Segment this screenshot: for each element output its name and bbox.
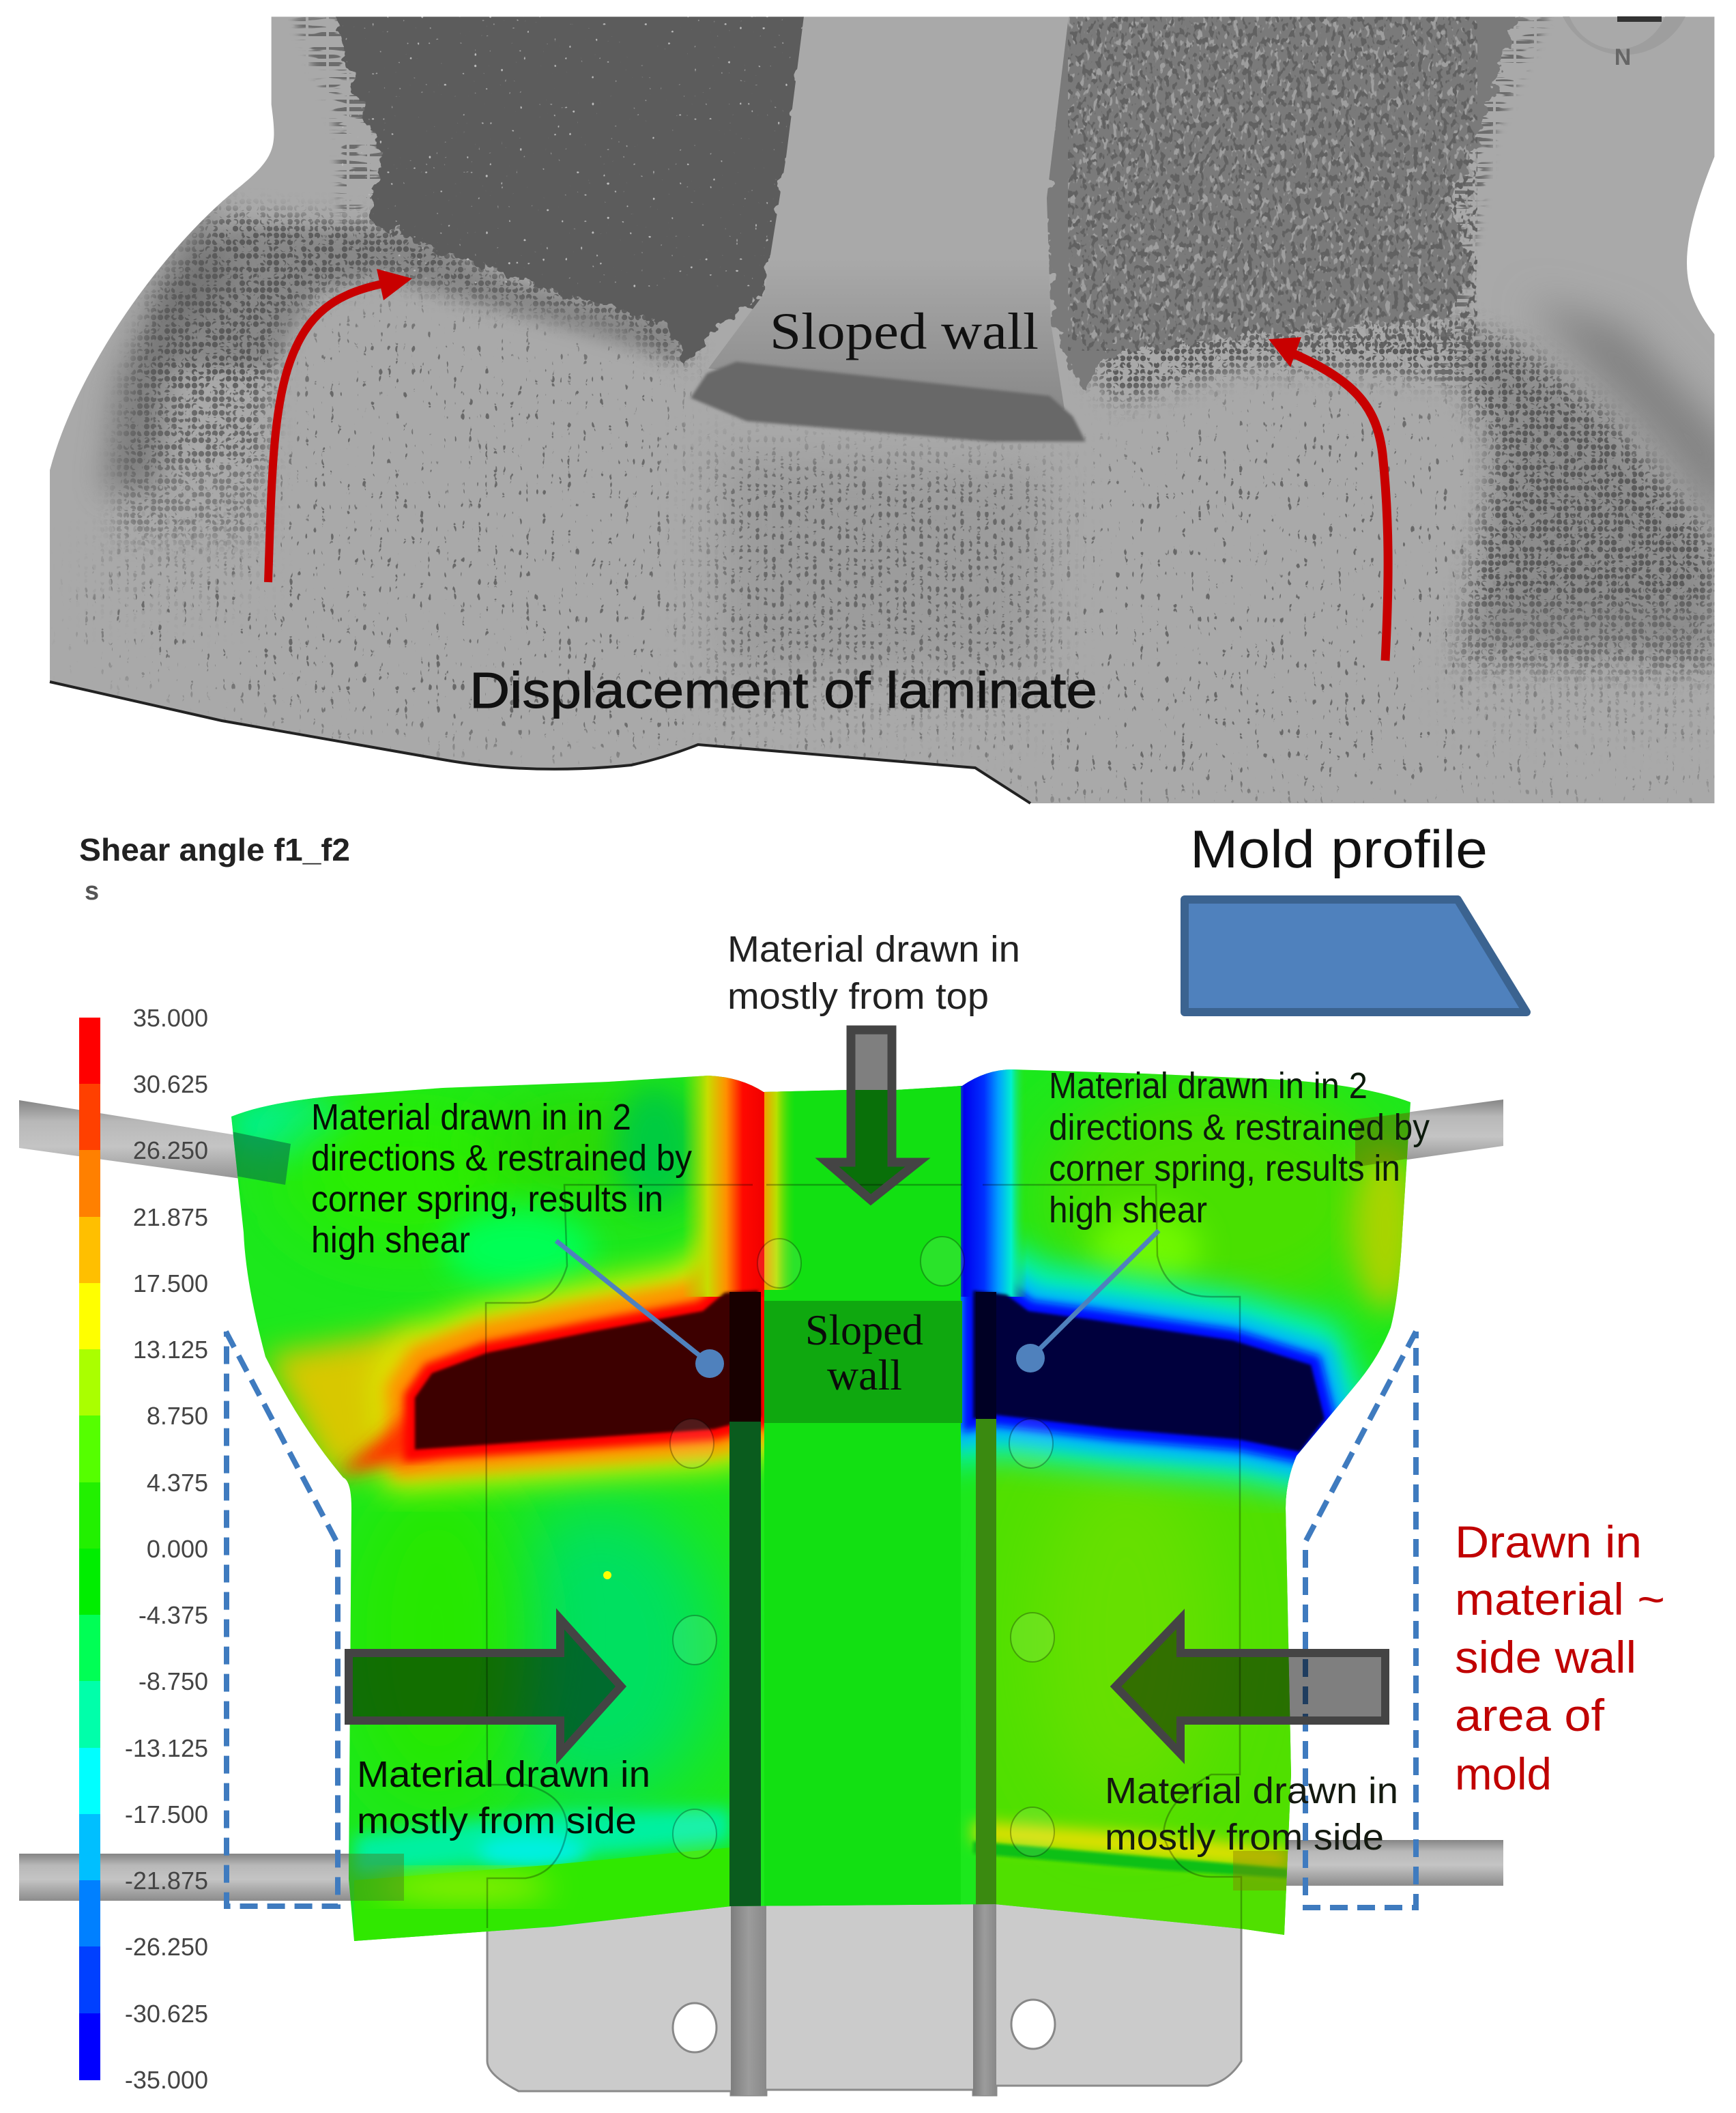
callout: right high shear: directions & restrained by <box>1049 1107 1430 1148</box>
dashed outline: left side wall <box>226 1332 338 1906</box>
compass marker <box>1563 16 1686 70</box>
contour: bottom edge bands <box>354 1809 1288 1945</box>
legend unit: s <box>85 877 99 906</box>
mold vertical bars over sheet <box>729 1292 996 1906</box>
plate holes <box>673 2000 1055 2052</box>
callout: drawn in material note: Drawn in <box>1455 1517 1642 1567</box>
legend: scale values: 8.750 <box>147 1402 208 1430</box>
label: sloped wall (contour view) <box>805 1306 923 1399</box>
legend: scale values: 4.375 <box>147 1469 208 1497</box>
compass marker: N <box>1615 44 1631 70</box>
arrow: material drawn from right side <box>1116 1619 1385 1754</box>
callout: right high shear <box>1049 1065 1430 1231</box>
mold plate <box>487 1877 1241 2095</box>
label: displacement of laminate: Displacement of laminate <box>469 662 1097 719</box>
mold holes seen through sheet <box>670 1237 1054 1858</box>
legend: scale values: 13.125 <box>133 1336 208 1364</box>
sloped wall lower band <box>691 362 1086 442</box>
callout: drawn in material note: area of <box>1455 1690 1605 1740</box>
legend: scale values: 0.000 <box>147 1535 208 1563</box>
callout: right high shear: Material drawn in in 2 <box>1049 1065 1368 1106</box>
central green column <box>764 1051 962 1952</box>
text: material drawn from top: mostly from top <box>727 976 989 1017</box>
contour: positive shear hot zone <box>265 1065 766 1478</box>
callout: drawn in material note: side wall <box>1455 1632 1636 1682</box>
heading: shear angle legend title: Shear angle f1_f2 <box>79 832 350 867</box>
simulated laminate sheet <box>0 0 1736 819</box>
text: material drawn from top: Material drawn in <box>727 929 1020 970</box>
legend: scale values: -21.875 <box>125 1867 208 1895</box>
legend: scale values: -8.750 <box>139 1667 208 1695</box>
contour: negative shear cold zone <box>955 1065 1337 1458</box>
heading: mold profile: Mold profile <box>1190 819 1488 879</box>
label: sloped wall (top view): Sloped wall <box>770 303 1039 360</box>
text: material drawn from left side: mostly from side <box>357 1800 637 1841</box>
right dense laminate block <box>1047 0 1523 389</box>
icon: mold profile shape <box>1185 900 1527 1012</box>
legend: scale values: -30.625 <box>125 2000 208 2028</box>
callout: right high shear: high shear <box>1049 1190 1207 1231</box>
text: material drawn from right side: mostly from side <box>1105 1817 1384 1858</box>
panel: displacement simulation view <box>0 0 1736 819</box>
callout: left high shear: high shear <box>311 1220 470 1261</box>
callout: left high shear <box>311 1097 692 1261</box>
callout: left high shear: directions & restrained by <box>311 1138 692 1179</box>
text: material drawn from left side <box>357 1754 650 1841</box>
sheet edge outline <box>50 682 1030 803</box>
rod: upper right <box>1355 1099 1503 1167</box>
rod overlap tints <box>231 1112 1410 1901</box>
label: sloped wall (contour view): Sloped <box>805 1306 923 1354</box>
callout: right high shear: corner spring, results in <box>1049 1148 1400 1189</box>
label: sloped wall (contour view): wall <box>827 1351 902 1399</box>
text: material drawn from right side <box>1105 1770 1398 1858</box>
text: material drawn from right side: Material drawn in <box>1105 1770 1398 1811</box>
rod: lower right <box>1233 1840 1503 1886</box>
legend: scale values: 35.000 <box>133 1004 208 1032</box>
chart: shear angle contour sheet <box>205 1051 1433 1952</box>
legend: scale values: 30.625 <box>133 1070 208 1098</box>
dashed outline: right side wall <box>1305 1332 1416 1908</box>
text: material drawn from left side: Material drawn in <box>357 1754 650 1795</box>
rod: lower left <box>19 1854 404 1901</box>
callout: drawn in material note: mold <box>1455 1749 1552 1799</box>
mold outline seen through sheet <box>486 1185 1241 1931</box>
legend: scale values: 21.875 <box>133 1203 208 1231</box>
legend: scale values: 17.500 <box>133 1269 208 1297</box>
callout: left high shear: corner spring, results in <box>311 1179 663 1220</box>
legend: scale values: -35.000 <box>125 2066 208 2094</box>
text: material drawn from top <box>727 929 1020 1017</box>
legend: scale values <box>125 1004 208 2094</box>
legend: scale values: -26.250 <box>125 1933 208 1961</box>
arrow: right laminate displacement <box>1269 337 1388 661</box>
legend: colour scale bar <box>79 1018 100 2080</box>
legend: scale values: -17.500 <box>125 1800 208 1828</box>
stray yellow node <box>603 1571 611 1579</box>
arrow: material drawn from top <box>827 1030 918 1200</box>
callout: drawn in material note <box>1455 1517 1665 1799</box>
arrow: material drawn from left side <box>349 1619 621 1754</box>
arrow: left laminate displacement <box>268 269 412 582</box>
callout: drawn in material note: material ~ <box>1455 1574 1665 1624</box>
legend: scale values: 26.250 <box>133 1136 208 1164</box>
rod: upper left <box>19 1100 291 1185</box>
left dense laminate block <box>332 0 814 366</box>
sloped wall surface <box>708 16 1069 409</box>
leader: right high shear zone <box>1016 1231 1159 1372</box>
leader: left high shear zone <box>556 1241 724 1378</box>
legend: scale values: -13.125 <box>125 1734 208 1762</box>
callout: left high shear: Material drawn in in 2 <box>311 1097 631 1138</box>
legend: scale values: -4.375 <box>139 1601 208 1629</box>
